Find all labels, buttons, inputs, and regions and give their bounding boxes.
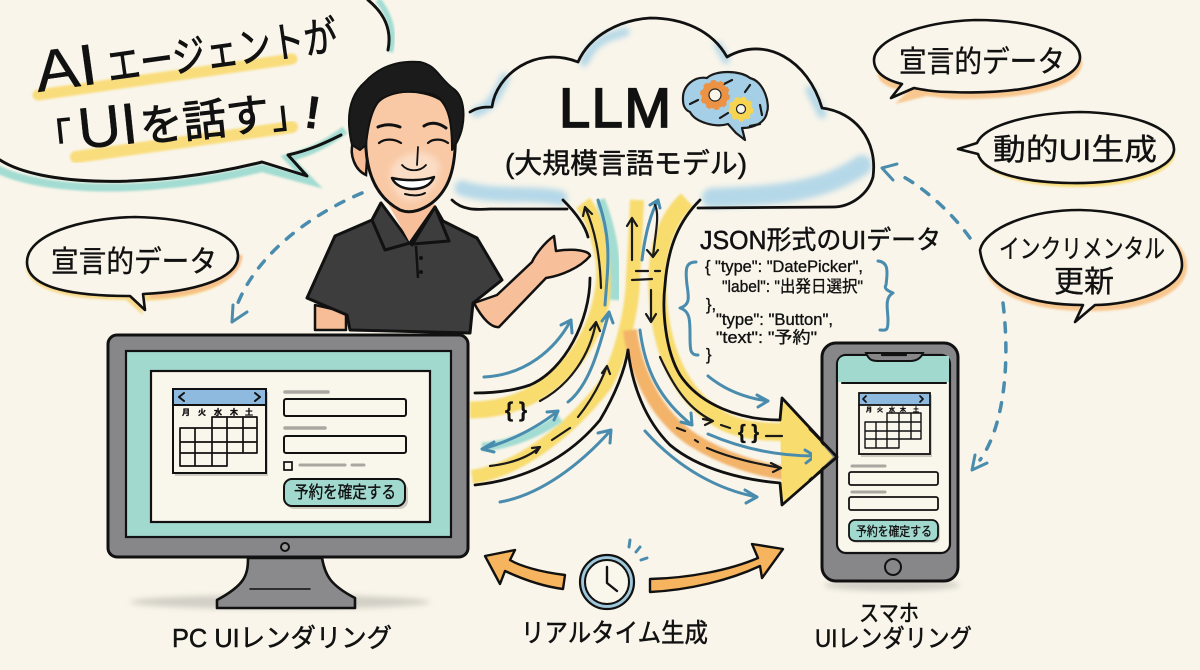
title text: 「	[33, 117, 75, 162]
cloud: LLM	[452, 18, 874, 210]
phone teal header	[838, 356, 949, 382]
monitor teal screen	[126, 351, 451, 537]
LLM subtitle: (大規模言語モデル)	[505, 148, 747, 179]
phone shadow	[824, 579, 960, 591]
monitor content panel	[151, 371, 430, 522]
realtime arrow right	[650, 544, 783, 592]
title text	[31, 12, 340, 162]
calendar widget: 火	[198, 408, 206, 417]
calendar widget: 月	[182, 408, 190, 417]
realtime arrow left	[485, 550, 565, 589]
face highlight	[390, 152, 440, 201]
title text: UI	[74, 91, 141, 162]
JSON right brace	[878, 261, 893, 330]
title text: !	[302, 85, 324, 139]
phone notch	[866, 353, 923, 361]
brace symbol left: { }	[505, 399, 527, 422]
title text: を話す	[137, 90, 272, 152]
neck	[385, 195, 435, 243]
phone calendar: 火	[877, 407, 883, 414]
dashed arrow: update to cloud	[882, 164, 970, 238]
speech bubble: left declarative data	[26, 217, 240, 315]
confirm button desktop: 予約を確定する	[294, 483, 396, 502]
monitor frame	[108, 335, 468, 557]
realtime generation label: リアルタイム生成	[521, 618, 708, 648]
icon: brain with gears	[683, 72, 768, 140]
eyes and brows	[378, 123, 446, 128]
JSON code block: "label": "出発日選択"	[722, 277, 863, 296]
calendar widget: 水	[214, 407, 222, 417]
smartphone rendering label: UIレンダリング	[815, 625, 972, 653]
phone calendar	[859, 393, 932, 457]
PC rendering label: PC UIレンダリング	[172, 623, 392, 653]
calendar widget: 土	[245, 407, 253, 417]
collar	[372, 203, 449, 250]
smartphone	[822, 343, 960, 591]
calendar widget	[173, 389, 268, 476]
title text: 」	[269, 92, 312, 138]
JSON left brace	[680, 262, 698, 355]
hair	[349, 62, 464, 150]
dashed arrow: update to phone	[972, 303, 1006, 470]
JSON code block: "type": "Button",	[716, 311, 833, 329]
phone body	[822, 343, 958, 581]
phone calendar: 土	[913, 406, 919, 414]
JSON section heading: JSON形式のUIデータ	[700, 225, 941, 255]
person: presenter	[307, 62, 590, 333]
smile	[392, 177, 434, 189]
LLM label: LLM	[559, 76, 671, 139]
cloud watercolor washes	[462, 32, 862, 198]
JSON code block: { "type": "DatePicker",	[705, 258, 863, 276]
dashed arrow: person to monitor	[232, 193, 362, 322]
monitor shadow	[130, 595, 430, 609]
face	[366, 91, 455, 212]
ear	[352, 142, 368, 175]
desktop monitor	[108, 335, 468, 609]
speech bubble: top right declarative data	[874, 20, 1082, 104]
brace symbol right: { }	[738, 422, 759, 444]
JSON code block	[705, 258, 863, 364]
left arm	[315, 305, 346, 330]
phone screen	[837, 355, 950, 553]
confirm button desktop	[284, 479, 408, 509]
title text: エージェントが	[104, 12, 340, 91]
JSON code block: }	[706, 346, 712, 364]
nose	[402, 147, 426, 170]
title text: AI	[31, 32, 101, 105]
phone form fields	[849, 466, 938, 510]
confirm button phone	[849, 520, 940, 543]
phone calendar: 月	[866, 407, 872, 414]
speech bubble: dynamic UI generation	[958, 112, 1175, 187]
monitor stand	[217, 558, 355, 608]
title speech bubble	[0, 0, 392, 188]
JSON code block: },	[706, 296, 716, 314]
confirm button phone: 予約を確定する	[856, 524, 932, 539]
speech bubble: incremental update	[980, 210, 1187, 322]
smartphone rendering label: スマホ	[859, 600, 919, 626]
arrowhead fill over phone	[812, 433, 833, 477]
form fields	[284, 392, 406, 470]
speech bubble: incremental update: 更新	[1054, 266, 1114, 299]
smartphone rendering label	[815, 600, 972, 653]
large yellow arrowhead	[780, 398, 837, 505]
blue and black flow arrows	[482, 200, 815, 503]
JSON code block: "text": "予約"	[716, 328, 817, 347]
phone calendar: 木	[900, 406, 906, 414]
calendar widget: 木	[230, 407, 238, 417]
speech bubble: top right declarative data: 宣言的データ	[899, 46, 1065, 79]
phone home button	[885, 559, 901, 575]
speech bubble: left declarative data: 宣言的データ	[51, 246, 217, 279]
speech bubble: dynamic UI generation: 動的UI生成	[993, 134, 1157, 167]
clock icon	[580, 540, 647, 609]
phone calendar: 水	[889, 406, 895, 414]
funnel outlines	[475, 200, 837, 505]
polo shirt	[307, 203, 502, 333]
monitor camera	[281, 543, 289, 551]
right arm and hand	[474, 236, 590, 327]
flow funnel bands	[470, 200, 837, 505]
arrowhead tip over phone	[810, 429, 837, 480]
